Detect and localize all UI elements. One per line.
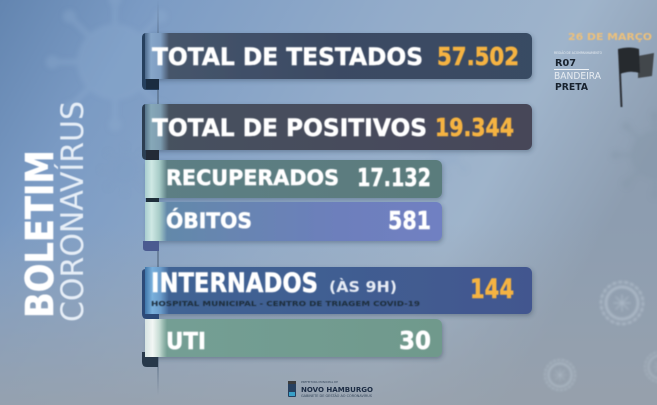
icon: black flag bbox=[618, 48, 654, 107]
title word: CORONAVÍRUS: CORONAVÍRUS bbox=[55, 101, 91, 322]
label: RECUPERADOS bbox=[166, 166, 339, 190]
flag word: BANDEIRA bbox=[554, 71, 601, 82]
time note: (ÀS 9H) bbox=[329, 277, 397, 296]
panel: total de testados bbox=[142, 33, 532, 90]
icon: city crest bbox=[288, 381, 296, 397]
panel: óbitos bbox=[143, 202, 442, 251]
logo subtitle: GABINETE DE GESTÃO AO CORONAVÍRUS bbox=[301, 393, 372, 398]
value: 30 bbox=[399, 326, 431, 355]
date: 26 DE MARÇO bbox=[568, 32, 652, 43]
panel: UTI bbox=[142, 319, 442, 367]
value: 17.132 bbox=[357, 163, 431, 192]
label: INTERNADOS bbox=[151, 268, 318, 299]
logo name: NOVO HAMBURGO bbox=[301, 386, 373, 394]
hospital subtitle: HOSPITAL MUNICIPAL - CENTRO DE TRIAGEM COVID-19 bbox=[151, 300, 420, 308]
region caption: REGIÃO DE ACOMPANHAMENTO bbox=[554, 50, 602, 55]
title word: BOLETIM: BOLETIM bbox=[18, 150, 62, 318]
title: Boletim Coronavírus bbox=[18, 101, 91, 322]
label: ÓBITOS bbox=[166, 208, 252, 233]
value: 581 bbox=[388, 206, 431, 235]
panel: total de positivos bbox=[142, 104, 532, 160]
label: TOTAL DE POSITIVOS bbox=[152, 114, 427, 142]
status block: bandeira preta bbox=[554, 50, 602, 93]
vertical ribbon spine bbox=[157, 0, 159, 395]
logo small caption: PREFEITURA MUNICIPAL DE bbox=[301, 380, 338, 384]
logo: Novo Hamburgo bbox=[288, 380, 373, 398]
flag colour: PRETA bbox=[555, 82, 589, 93]
label: UTI bbox=[166, 329, 206, 355]
label: TOTAL DE TESTADOS bbox=[152, 43, 423, 71]
value: 144 bbox=[470, 274, 514, 305]
panel: recuperados bbox=[145, 160, 442, 203]
value: 57.502 bbox=[437, 42, 519, 71]
value: 19.344 bbox=[435, 113, 514, 142]
panel: internados bbox=[142, 267, 532, 319]
region code: R07 bbox=[555, 58, 576, 69]
